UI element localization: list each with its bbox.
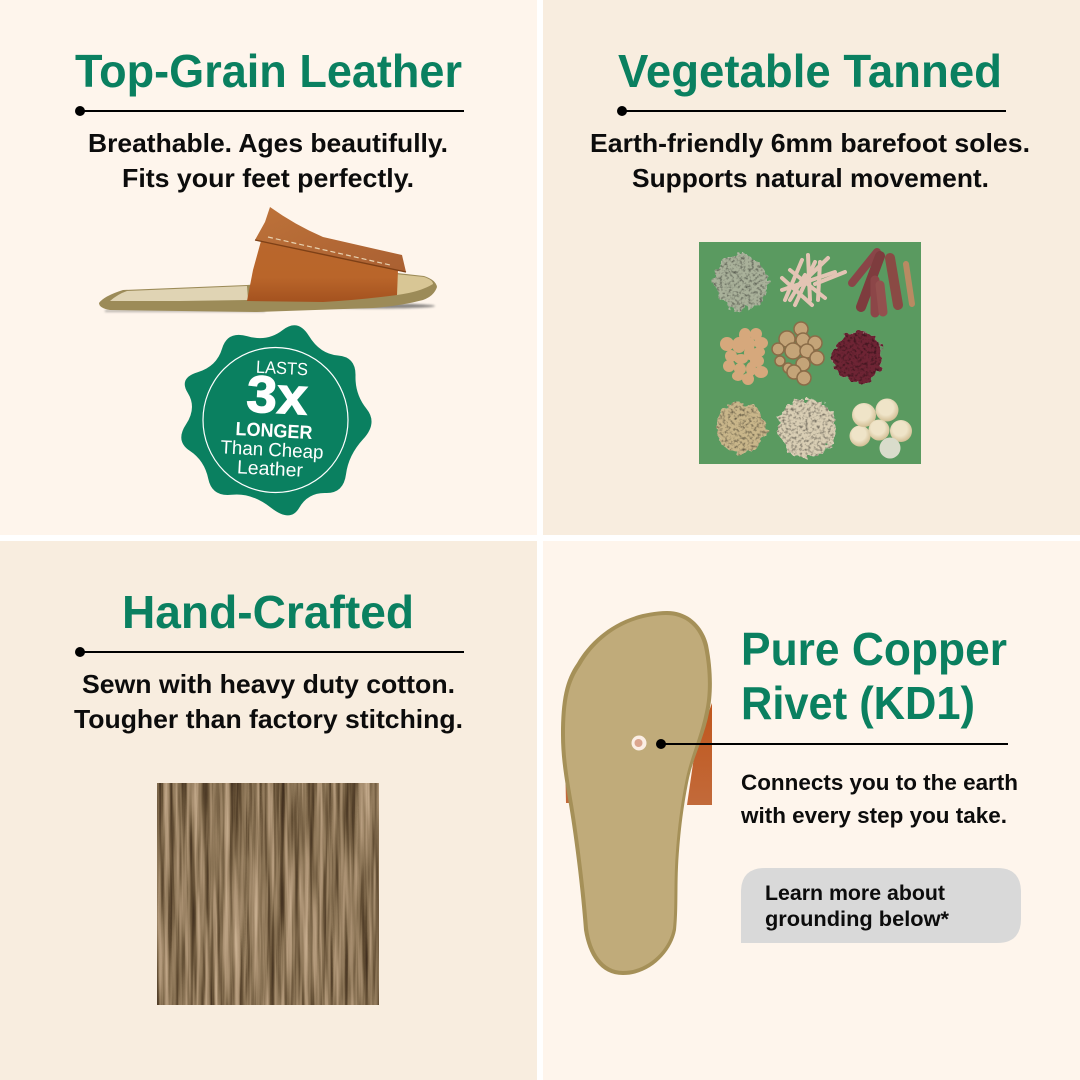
heading: Pure Copper Rivet (KD1) <box>741 623 1007 729</box>
text: leather benefits <box>88 128 448 193</box>
bark sticks: top-right pile <box>852 252 912 313</box>
panel: vegetable tanned <box>543 0 1080 535</box>
callout: learn more about grounding: grounding below* <box>765 908 950 931</box>
badge: lasts 3x longer: 3x <box>245 365 309 427</box>
badge: lasts 3x longer: LASTS <box>256 357 308 379</box>
image: natural tanning ingredients <box>699 242 921 464</box>
panel: pure copper rivet <box>543 541 1080 1080</box>
text: sole benefits: Supports natural movement. <box>632 163 989 193</box>
image: sandal sole with copper rivet <box>561 611 712 975</box>
text: stitching benefits <box>74 669 463 734</box>
cups: middle pile <box>772 322 824 385</box>
divider with dot <box>617 106 1006 116</box>
text: sole benefits: Earth-friendly 6mm barefoot soles. <box>590 128 1030 158</box>
heading: Top-Grain Leather: Top-Grain Leather <box>75 45 462 97</box>
text: leather benefits: Fits your feet perfectly. <box>122 163 414 193</box>
callout line and dot <box>656 739 1008 749</box>
panel: hand-crafted <box>0 541 537 1080</box>
heading: Pure Copper Rivet (KD1): Rivet (KD1) <box>741 677 975 729</box>
badge: lasts 3x longer: Leather <box>236 457 304 482</box>
nuts: middle-left pile <box>720 328 768 385</box>
divider with dot <box>75 647 464 657</box>
text: grounding benefit: Connects you to the earth <box>741 770 1018 795</box>
text: leather benefits: Breathable. Ages beautifully. <box>88 128 448 158</box>
heading: Hand-Crafted: Hand-Crafted <box>122 586 414 638</box>
heading: Pure Copper Rivet (KD1): Pure Copper <box>741 623 1007 675</box>
callout: learn more about grounding <box>741 868 1021 943</box>
image: cotton thread strands <box>157 783 379 1005</box>
callout: learn more about grounding: Learn more about <box>765 882 945 905</box>
text: stitching benefits: Sewn with heavy duty cotton. <box>82 669 455 699</box>
badge: lasts 3x longer: Than Cheap <box>220 437 324 464</box>
text: grounding benefit <box>740 770 1018 828</box>
ingredient piles <box>714 255 883 457</box>
wood shavings: top-middle pile <box>782 255 845 305</box>
icon: leather slide sandal <box>99 207 437 312</box>
badge: lasts 3x longer: LONGER <box>235 419 313 444</box>
text: sole benefits <box>590 128 1030 193</box>
divider with dot <box>75 106 464 116</box>
round fruits: bottom-right pile <box>850 398 912 458</box>
text: grounding benefit: with every step you take. <box>740 803 1007 828</box>
text: stitching benefits: Tougher than factory stitching. <box>74 704 463 734</box>
heading: Vegetable Tanned: Vegetable Tanned <box>618 45 1002 97</box>
badge: lasts 3x longer <box>181 325 372 515</box>
panel: top-grain leather <box>0 0 537 535</box>
copper rivet <box>632 736 646 750</box>
